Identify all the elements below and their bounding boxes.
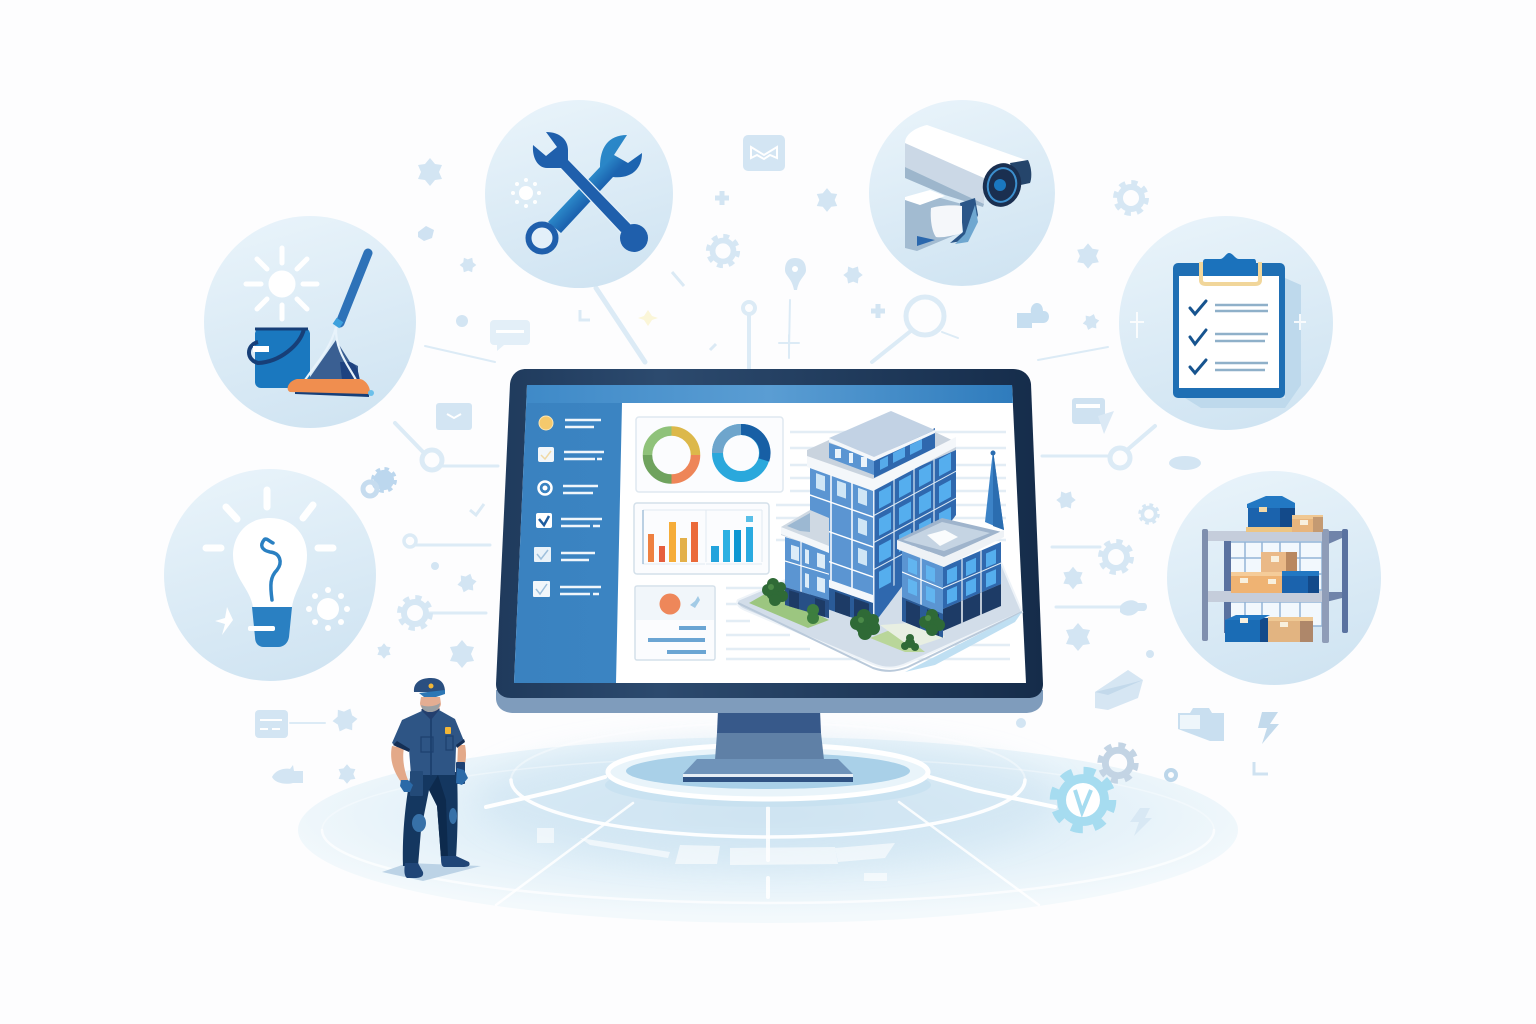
arms xyxy=(391,745,466,782)
circle: cleaning xyxy=(204,216,416,428)
storage boxes xyxy=(1225,496,1323,642)
trees xyxy=(762,578,945,651)
circle: lightbulb xyxy=(164,469,376,681)
circle: inspection checklist xyxy=(1119,216,1333,430)
icon: sun xyxy=(246,248,317,319)
cap xyxy=(414,678,445,692)
panel: donut charts xyxy=(636,417,783,492)
icon: sparkles xyxy=(1130,312,1306,338)
circle: storage shelves xyxy=(1167,471,1381,685)
belt and gear xyxy=(410,771,423,796)
panel: bar charts xyxy=(634,503,769,574)
icon: spark xyxy=(215,607,233,635)
shirt xyxy=(392,710,464,775)
panel: status card xyxy=(635,586,715,660)
faint background lines xyxy=(726,432,1010,659)
monitor screen xyxy=(514,385,1026,683)
boots xyxy=(404,856,470,878)
circle: security camera xyxy=(869,100,1055,286)
sidebar menu xyxy=(533,416,604,597)
icon: shelving unit xyxy=(1202,496,1348,643)
gloves xyxy=(400,768,468,792)
building illustration xyxy=(737,411,1022,672)
icon: bucket xyxy=(249,328,310,388)
site base xyxy=(737,560,1022,672)
icon: mop xyxy=(288,253,374,397)
tower xyxy=(807,411,956,625)
right wing xyxy=(897,518,1004,638)
icon: small sun xyxy=(511,178,541,208)
icon: crossed wrenches xyxy=(528,132,648,252)
left wing xyxy=(781,510,829,618)
face xyxy=(420,697,441,712)
monitor xyxy=(496,369,1043,782)
spire xyxy=(985,450,1004,530)
icon: bulb xyxy=(233,518,307,647)
icon: clipboard xyxy=(1173,253,1301,408)
legs xyxy=(403,772,458,866)
monitor stand xyxy=(683,710,853,782)
connector lines and ring nodes xyxy=(290,288,1155,723)
security guard xyxy=(382,678,481,881)
checklist rows xyxy=(1190,301,1268,373)
circle: repairs xyxy=(485,100,673,288)
ground shadow xyxy=(382,863,481,881)
icon: small sun xyxy=(306,587,350,631)
icon: light rays xyxy=(206,490,333,548)
scattered decorative icons xyxy=(255,135,1279,836)
gears near platform xyxy=(1054,745,1136,829)
floor platform xyxy=(298,723,1238,923)
icon: camera xyxy=(905,125,1031,251)
monitor pedestal ring xyxy=(605,745,931,807)
knee pads xyxy=(412,814,426,832)
